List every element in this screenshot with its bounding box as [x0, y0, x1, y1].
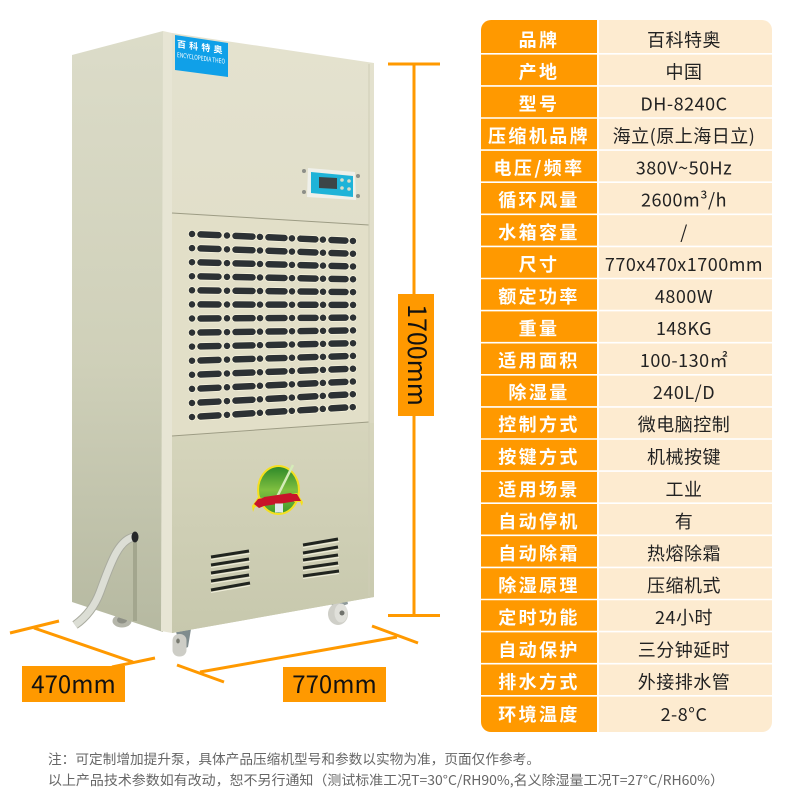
ventilation grille	[192, 234, 354, 417]
specification table	[481, 20, 772, 732]
row: area: 适用面积	[498, 347, 580, 373]
row: drainage	[498, 668, 730, 694]
row: tank: 水箱容量	[498, 219, 580, 245]
row: size	[519, 251, 763, 277]
row: dehumidification	[508, 379, 715, 405]
row: size: 尺寸	[519, 251, 559, 277]
row: principle	[498, 572, 721, 598]
row: tank	[498, 219, 688, 245]
row: origin: 产地	[519, 58, 559, 84]
row: weight	[519, 315, 712, 341]
row: power: 额定功率	[498, 283, 580, 309]
row: timer: 定时功能	[498, 604, 580, 630]
row: auto stop	[498, 508, 693, 534]
row: voltage	[494, 154, 732, 180]
row: defrost: 自动除霜	[498, 540, 580, 566]
certification sticker	[252, 465, 303, 515]
row: compressor brand: 海立(原上海日立)	[613, 122, 755, 148]
cabinet front panel	[172, 33, 374, 633]
row: weight: 重量	[519, 315, 559, 341]
row: model: DH-8240C	[640, 90, 728, 116]
row: power: 4800W	[655, 283, 713, 309]
row: brand: 百科特奥	[647, 26, 721, 52]
row: principle: 除湿原理	[498, 572, 580, 598]
row: model	[519, 90, 728, 116]
row: scenario	[498, 476, 702, 502]
right caster	[328, 595, 348, 625]
row: keys: 机械按键	[647, 444, 721, 470]
right panel edge	[368, 64, 370, 596]
row: protection	[498, 636, 730, 662]
drain hose	[75, 532, 138, 625]
row: voltage: 电压/频率	[494, 154, 584, 180]
row: control: 控制方式	[498, 411, 580, 437]
row: compressor brand	[488, 122, 755, 148]
row: size: 770x470x1700mm	[605, 251, 763, 277]
row: keys: 按键方式	[498, 444, 580, 470]
right louvre vent	[303, 539, 339, 578]
cabinet side panel	[72, 31, 163, 632]
table background	[481, 20, 772, 732]
width dimension: 770mm: 770mm	[292, 665, 377, 700]
row: principle: 压缩机式	[647, 572, 721, 598]
lower panel	[172, 423, 374, 633]
upper panel seam	[172, 213, 369, 225]
brand label: 百科特奥	[177, 37, 226, 57]
row: brand	[519, 26, 721, 52]
footnote: 以上产品技术参数如有改动，恕不另行通知（测试标准工况T=30°C/RH90%,名义除湿量工况T=27°C/RH60%）	[48, 769, 724, 789]
lower panel seam	[172, 422, 369, 436]
row: protection: 自动保护	[498, 636, 580, 662]
grille panel	[172, 214, 369, 436]
control panel	[302, 168, 360, 200]
row: scenario: 适用场景	[498, 476, 580, 502]
footnote	[48, 748, 724, 789]
row: control: 微电脑控制	[638, 411, 730, 437]
brand label: ENCYCLOPEDIA THEO	[177, 49, 225, 66]
back caster	[112, 614, 132, 628]
row: airflow	[498, 186, 727, 212]
row: scenario: 工业	[666, 476, 702, 502]
row: defrost	[498, 540, 721, 566]
row: auto stop: 自动停机	[498, 508, 580, 534]
width dimension: 770mm	[177, 626, 418, 702]
row: keys	[498, 444, 721, 470]
brand label	[175, 35, 228, 77]
cabinet corner strip	[161, 31, 172, 633]
row: timer: 24小时	[655, 604, 713, 630]
left louvre vent	[211, 551, 250, 592]
footnote: 注：可定制增加提升泵，具体产品压缩机型号和参数以实物为准，页面仅作参考。	[48, 748, 540, 768]
row: dehumidification: 240L/D	[653, 379, 715, 405]
row: airflow: 2600m³/h	[641, 186, 727, 212]
row: weight: 148KG	[656, 315, 712, 341]
product: dehumidifier cabinet	[72, 31, 374, 656]
row: protection: 三分钟延时	[638, 636, 730, 662]
row: compressor brand: 压缩机品牌	[488, 122, 590, 148]
row: area	[498, 347, 728, 373]
row: area: 100-130㎡	[640, 347, 728, 373]
row: temperature	[498, 701, 707, 727]
row: dehumidification: 除湿量	[508, 379, 570, 405]
row: auto stop: 有	[675, 508, 693, 534]
row: power	[498, 283, 713, 309]
height dimension: 1700mm: 1700mm	[400, 304, 436, 406]
row: origin	[519, 58, 702, 84]
depth dimension: 470mm: 470mm	[31, 665, 116, 700]
row: tank: /	[680, 219, 688, 245]
row: timer	[498, 604, 713, 630]
row: drainage: 外接排水管	[638, 668, 730, 694]
row: control	[498, 411, 730, 437]
height dimension: 1700mm	[388, 64, 440, 616]
row: defrost: 热熔除霜	[647, 540, 721, 566]
row: origin: 中国	[666, 58, 702, 84]
front caster	[172, 629, 191, 656]
row: temperature: 2-8°C	[661, 701, 707, 727]
row: voltage: 380V~50Hz	[636, 154, 732, 180]
row: model: 型号	[519, 90, 559, 116]
row: brand: 品牌	[519, 26, 559, 52]
row: airflow: 循环风量	[498, 186, 580, 212]
depth dimension: 470mm	[10, 621, 155, 702]
row: temperature: 环境温度	[498, 701, 580, 727]
row: drainage: 排水方式	[498, 668, 580, 694]
